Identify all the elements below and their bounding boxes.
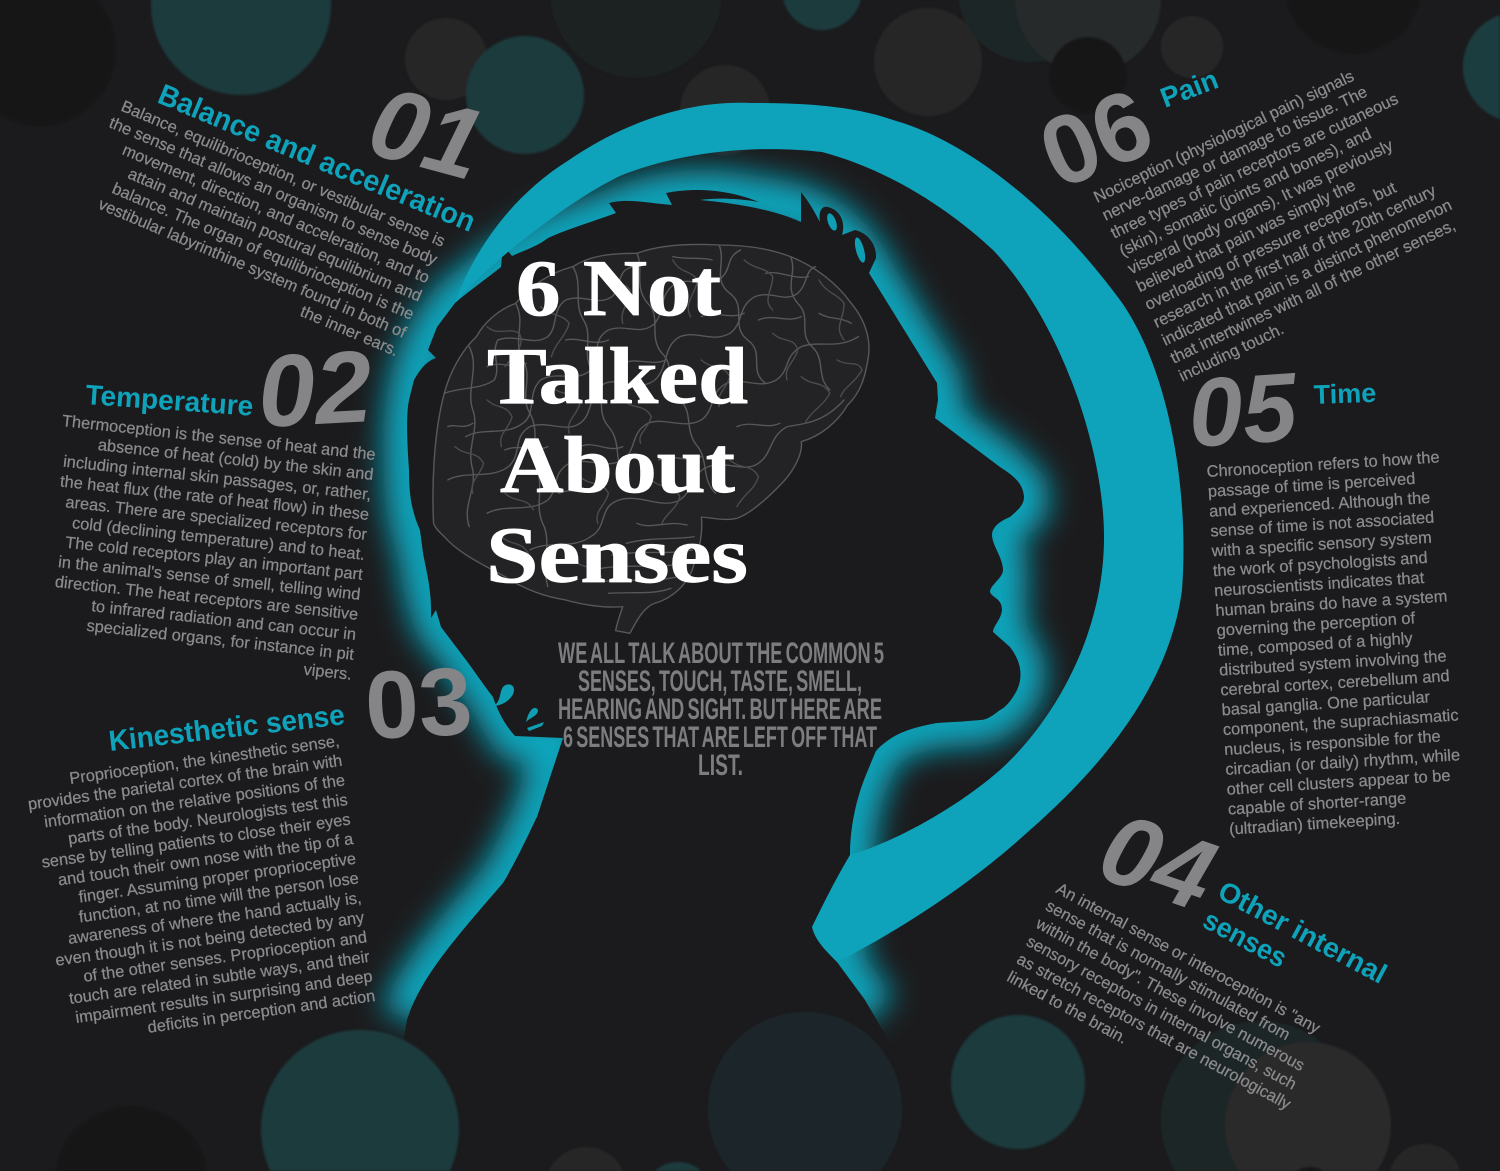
- text: pain: visceral (body organs). It was previously: [1125, 136, 1397, 278]
- text: kinesthetic: finger. Assuming proper proprioceptive: [78, 850, 357, 907]
- text: other internal: as stretch receptors that are neurologically: [1014, 950, 1294, 1114]
- text: pain: believed that pain was simply the: [1134, 176, 1358, 296]
- text: temperature: the heat flux (the rate of heat flow) in these: [59, 472, 370, 524]
- text: temperature: direction. The heat receptors are sensitive: [54, 573, 359, 624]
- text: balance: the sense that allows an organism to sense body: [106, 114, 440, 269]
- text: kinesthetic: and touch their own nose with the tip of a: [57, 830, 355, 889]
- text: temperature: to infrared radiation and can occur in: [91, 597, 357, 644]
- text: temperature: [37, 412, 377, 684]
- heading: other internal senses: senses: [1198, 904, 1292, 974]
- text: pain: nerve-damage or damage to tissue. The: [1099, 83, 1370, 224]
- section 04: other internal senses: [1003, 791, 1392, 1132]
- glow around head: [406, 195, 1023, 1018]
- text: time: distributed system involving the: [1219, 647, 1447, 680]
- text: kinesthetic: information on the relative positions of the: [43, 771, 346, 831]
- text: time: [1205, 448, 1465, 839]
- subtitle: LIST.: [698, 749, 743, 782]
- text: balance: vestibular labyrinthine system found in both of: [96, 195, 409, 342]
- text: pain: research in the first half of the 20th century: [1151, 181, 1440, 332]
- text: temperature: areas. There are specialized receptors for: [65, 493, 368, 544]
- subtitle: 6 SENSES THAT ARE LEFT OFF THAT: [563, 721, 877, 754]
- heading: time: Time: [1313, 378, 1377, 410]
- title: About: [500, 422, 735, 510]
- text: time: human brains do have a system: [1215, 587, 1448, 620]
- text: time: basal ganglia. One particular: [1221, 688, 1431, 719]
- title: 6 Not: [516, 245, 721, 333]
- text: time: component, the suprachiasmatic: [1222, 706, 1459, 739]
- text: other internal: sensory receptors in internal organs, such: [1023, 932, 1299, 1093]
- text: pain: [1091, 53, 1472, 385]
- hair and neck leaves: [494, 212, 867, 731]
- text: kinesthetic: awareness of where the hand actually is,: [67, 889, 363, 948]
- text: time: (ultradian) timekeeping.: [1229, 810, 1401, 838]
- text: time: other cell clusters appear to be: [1226, 767, 1451, 799]
- text: other internal: within the body". These involve numerous: [1032, 914, 1307, 1075]
- section 06: pain: [1025, 53, 1472, 385]
- text: kinesthetic: impairment results in surprising and deep: [74, 967, 374, 1027]
- text: time: cerebral cortex, cerebellum and: [1220, 667, 1450, 699]
- text: balance: balance. The organ of equilibrioception is the: [109, 180, 417, 324]
- heading: pain: Pain: [1156, 63, 1222, 114]
- head silhouette: [380, 190, 1024, 1171]
- text: pain: that intertwines with all of the other senses,: [1168, 216, 1458, 367]
- bokeh circles: top: [0, 0, 1500, 155]
- text: balance: the inner ears.: [298, 303, 401, 360]
- text: balance: movement, direction, and acceleration, and to: [120, 141, 432, 287]
- text: kinesthetic: parts of the body. Neurologists test this: [67, 791, 349, 848]
- heading: balance and acceleration: Balance and acceleration: [153, 78, 480, 239]
- text: kinesthetic: sense by telling patients to close their eyes: [40, 811, 352, 872]
- heading: other internal senses: Other internal: [1213, 875, 1392, 990]
- text: temperature: Thermoception is the sense of heat and the: [61, 412, 377, 464]
- text: kinesthetic: even though it is not being detected by any: [54, 908, 366, 970]
- section 02: temperature: [37, 329, 377, 684]
- text: temperature: cold (declining temperature) and to heat.: [71, 514, 366, 564]
- text: time: circadian (or daily) rhythm, while: [1225, 746, 1461, 779]
- ribbon arc: [455, 103, 1183, 962]
- text: time: passage of time is perceived: [1207, 470, 1416, 501]
- title: Talked: [487, 333, 748, 421]
- subtitle: SENSES, TOUCH, TASTE, SMELL,: [578, 665, 862, 698]
- number 04: 04: [1087, 791, 1228, 933]
- text: time: neuroscientists indicates that: [1214, 569, 1425, 600]
- text: temperature: absence of heat (cold) by the skin and: [97, 436, 374, 484]
- title: Senses: [486, 512, 748, 600]
- brain illustration: [433, 244, 869, 633]
- text: temperature: specialized organs, for instance in pit: [86, 617, 355, 664]
- text: pain: Nociception (physiological pain) signals: [1091, 67, 1357, 207]
- text: time: capable of shorter-range: [1227, 789, 1407, 819]
- text: pain: overloading of pressure receptors, but: [1142, 179, 1399, 314]
- section 03: kinesthetic sense: [24, 648, 475, 1049]
- text: balance: attain and maintain postural equilibrium and: [125, 165, 424, 305]
- text: kinesthetic: deficits in perception and action: [146, 987, 376, 1037]
- text: other internal: [1003, 879, 1333, 1132]
- bokeh circles: bottom: [56, 1012, 1460, 1171]
- number 05: 05: [1185, 352, 1302, 468]
- text: other internal: An internal sense or interoception is "any: [1053, 880, 1324, 1038]
- section 01: balance and acceleration: [68, 65, 495, 360]
- text: kinesthetic: of the other senses. Proprioception and: [82, 928, 368, 986]
- text: pain: indicated that pain is a distinct phenomenon: [1159, 196, 1455, 350]
- number 03: 03: [362, 648, 475, 760]
- text: temperature: in the animal's sense of smell, telling wind: [57, 553, 361, 604]
- text: time: and experienced. Although the: [1209, 489, 1431, 521]
- text: pain: including touch.: [1176, 320, 1287, 385]
- text: pain: three types of pain receptors are cutaneous: [1108, 90, 1401, 242]
- heading: temperature: Temperature: [85, 379, 254, 422]
- text: balance: [68, 96, 448, 360]
- text: time: governing the perception of: [1216, 609, 1416, 640]
- text: time: with a specific sensory system: [1210, 529, 1432, 560]
- text: kinesthetic: [24, 732, 377, 1049]
- text: balance: Balance, equilibrioception, or vestibular sense is: [118, 97, 447, 251]
- text: temperature: including internal skin passages, or, rather,: [62, 453, 372, 504]
- subtitle: WE ALL TALK ABOUT THE COMMON 5: [558, 637, 884, 670]
- number 01: 01: [358, 65, 495, 202]
- text: kinesthetic: Proprioception, the kinesthetic sense,: [68, 732, 341, 788]
- number 02: 02: [255, 329, 374, 449]
- text: kinesthetic: touch are related in subtle ways, and their: [68, 948, 371, 1008]
- subtitle: [558, 637, 884, 782]
- text: time: the work of psychologists and: [1212, 549, 1428, 580]
- text: kinesthetic: provides the parietal cortex of the brain with: [27, 752, 343, 814]
- text: time: Chronoception refers to how the: [1206, 448, 1440, 481]
- text: other internal: sense that is normally stimulated from: [1043, 897, 1293, 1044]
- heading: kinesthetic sense: Kinesthetic sense: [107, 699, 346, 758]
- text: time: sense of time is not associated: [1210, 509, 1435, 541]
- text: temperature: The cold receptors play an important part: [64, 534, 364, 584]
- text: pain: (skin), somatic (joints and bones), and: [1117, 125, 1374, 260]
- section 05: time: [1185, 352, 1465, 839]
- text: kinesthetic: function, at no time will the person lose: [78, 869, 360, 927]
- text: time: nucleus, is responsible for the: [1224, 727, 1441, 759]
- subtitle: HEARING AND SIGHT. BUT HERE ARE: [558, 693, 882, 726]
- text: temperature: vipers.: [303, 661, 353, 684]
- text: other internal: linked to the brain.: [1004, 968, 1130, 1048]
- text: time: time, composed of a highly: [1217, 629, 1414, 660]
- title: [486, 245, 748, 600]
- number 06: 06: [1025, 67, 1167, 209]
